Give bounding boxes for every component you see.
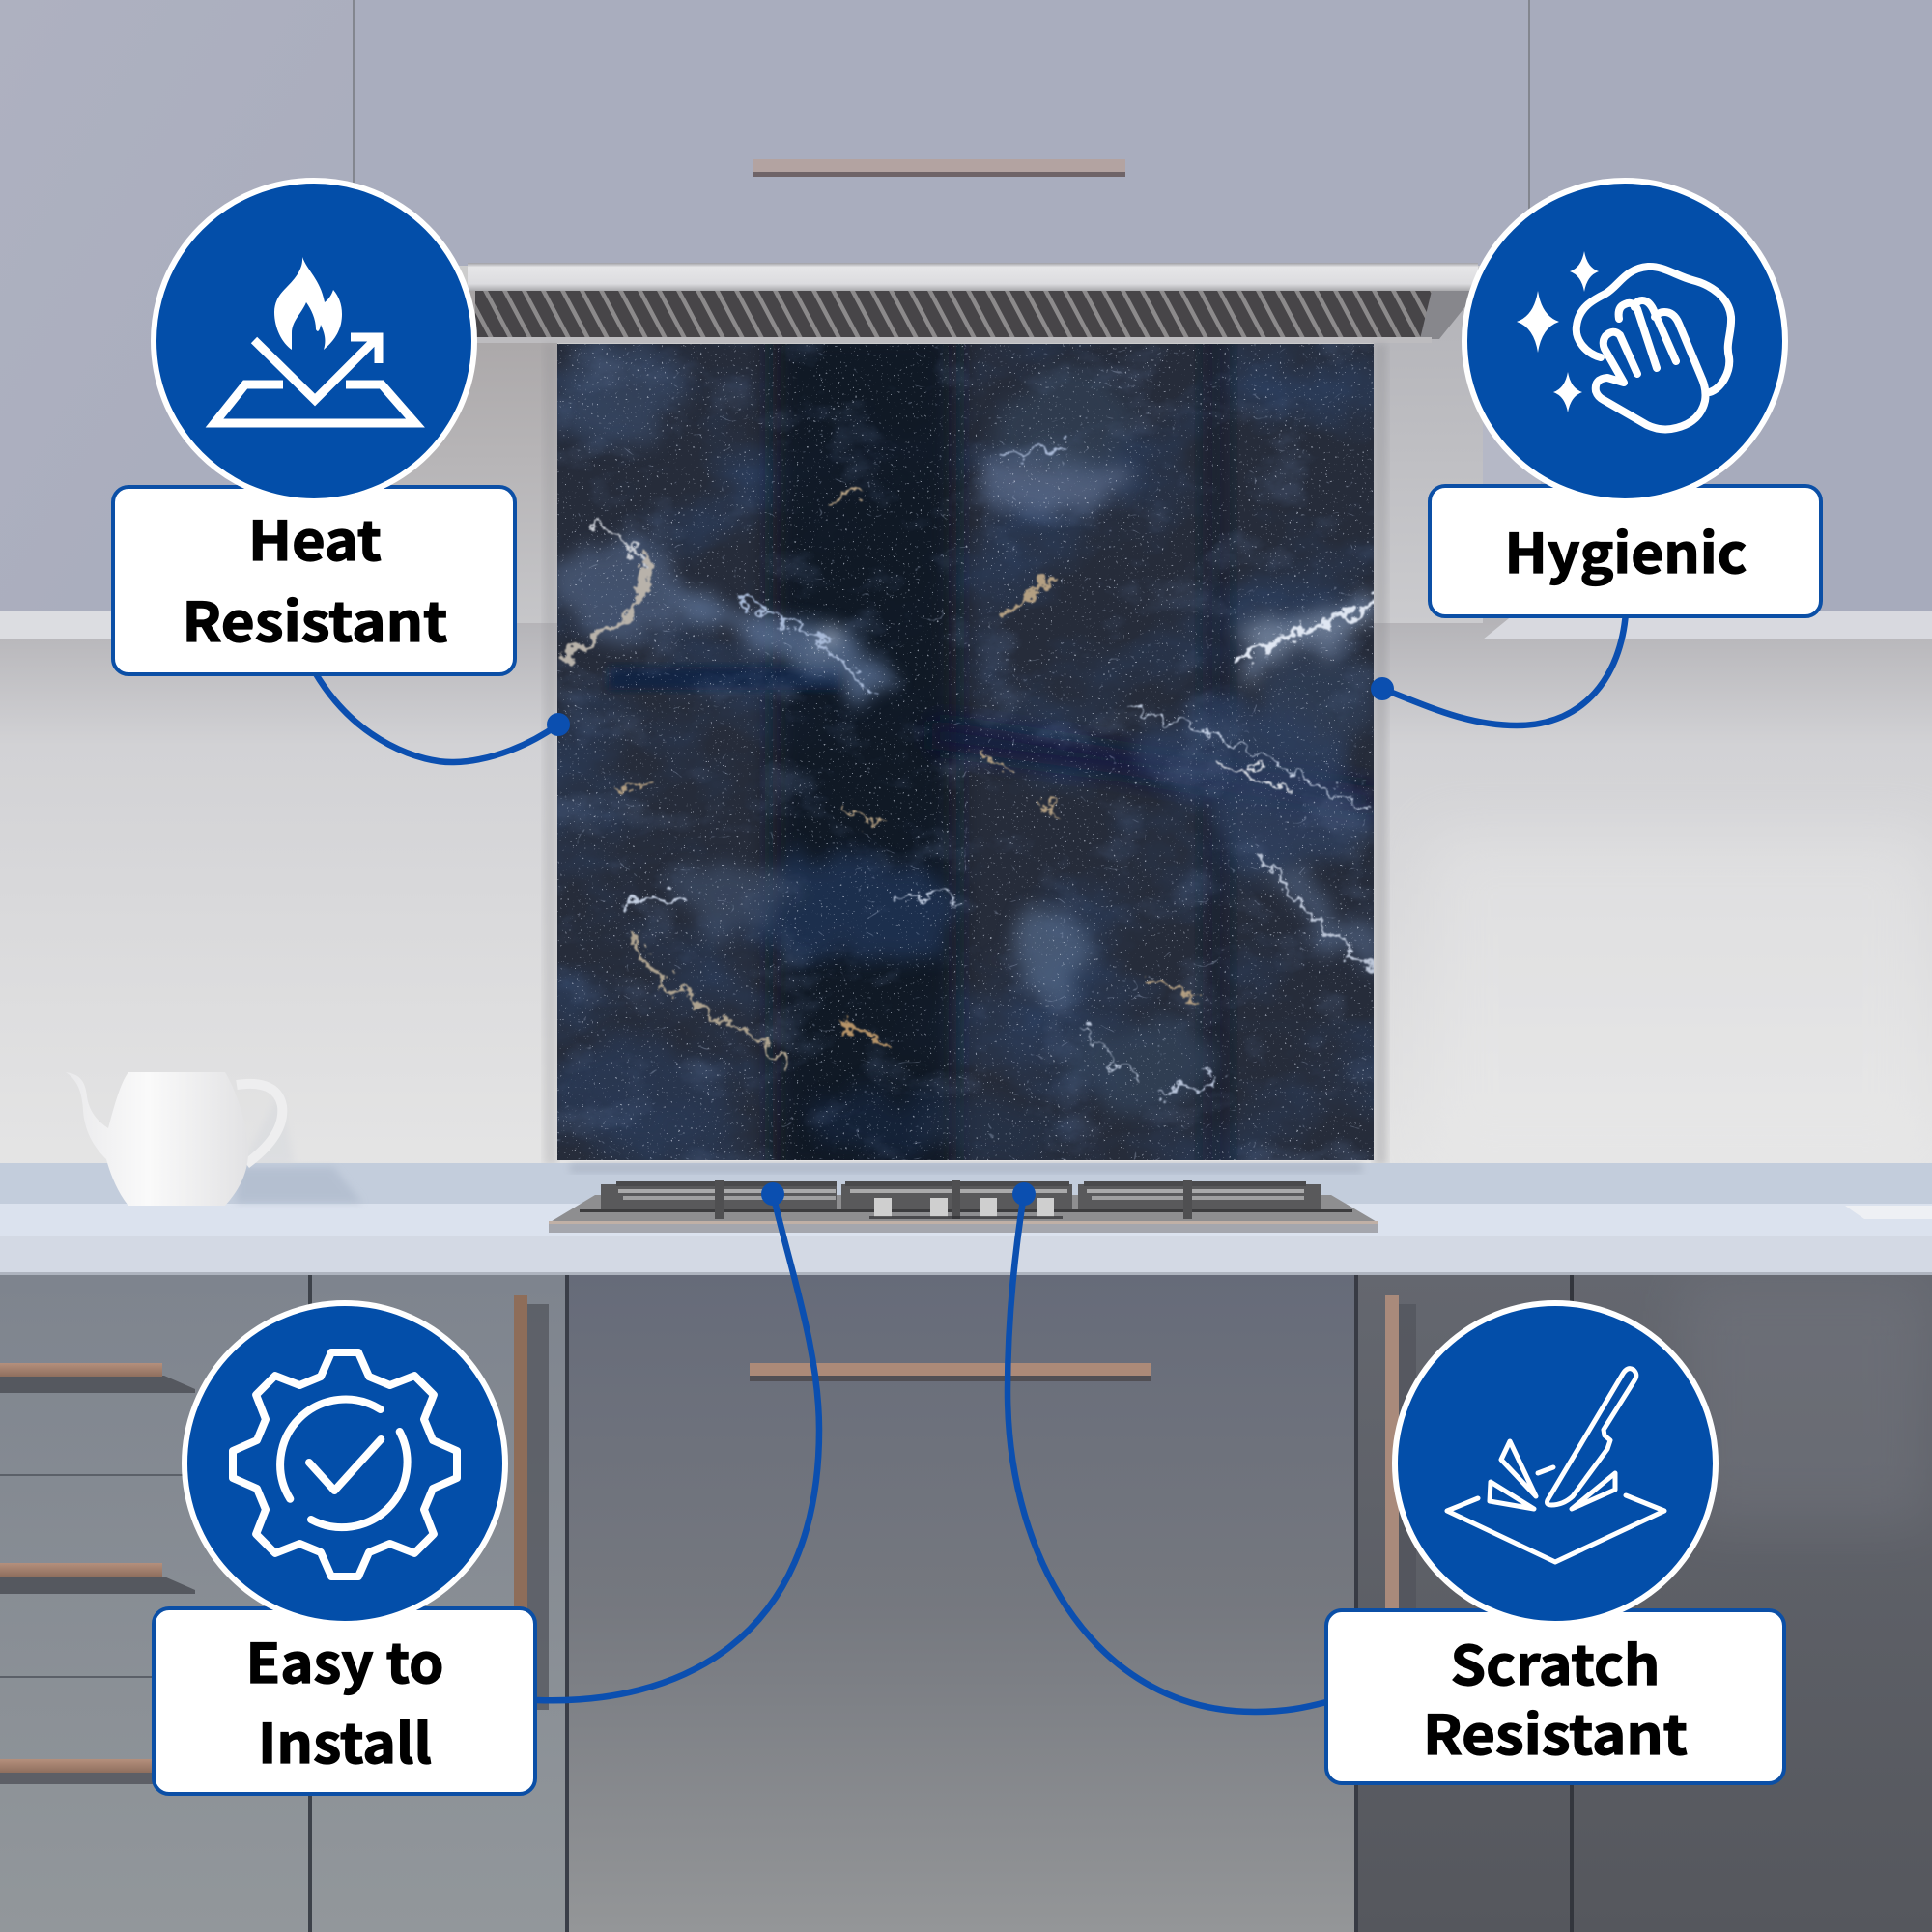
label box: scratch resistant xyxy=(1326,1610,1784,1783)
panel: scratch resistant xyxy=(1326,1303,1784,1783)
cabinet handle top xyxy=(753,159,1125,177)
icon disc: easy to install xyxy=(185,1303,505,1624)
icon disc: scratch resistant xyxy=(1395,1303,1716,1624)
cabinet handles lower xyxy=(0,1295,1416,1784)
connector: heat resistant xyxy=(315,672,570,762)
marble gold veins xyxy=(618,488,1196,1067)
icon: gear with check mark xyxy=(233,1352,457,1577)
cooktop xyxy=(549,1180,1378,1233)
dark reflection bands xyxy=(609,328,1374,1179)
countertop xyxy=(0,1163,1932,1275)
marble light cloud patches xyxy=(546,338,1381,1159)
marble splashback panel xyxy=(546,328,1381,1179)
icon: flame over surface with arrow xyxy=(214,257,415,423)
label box: scratch resistant: Resistant xyxy=(1423,1692,1688,1771)
label box: heat resistant: Resistant xyxy=(182,580,448,658)
icon disc: heat resistant xyxy=(154,181,474,501)
icon: hand wiping with sparkles xyxy=(1517,251,1731,429)
label box: easy to install: Install xyxy=(258,1701,432,1779)
label box: heat resistant: Heat xyxy=(248,498,382,577)
label box: hygienic xyxy=(1430,486,1821,616)
panel: hygienic xyxy=(1430,181,1821,616)
cooker hood xyxy=(468,263,1478,343)
icon: knife scratching surface xyxy=(1447,1369,1664,1562)
icon disc: hygienic xyxy=(1464,181,1785,501)
panel: heat resistant xyxy=(113,181,515,674)
label box: hygienic: Hygienic xyxy=(1505,511,1747,589)
label box: easy to install xyxy=(154,1608,535,1794)
marble white veins xyxy=(557,444,1374,1092)
connector: easy to install xyxy=(537,1182,819,1700)
teapot xyxy=(66,1072,362,1206)
upper cabinets xyxy=(0,0,1932,639)
lower cabinets xyxy=(0,1275,1932,1932)
label box: easy to install: Easy to xyxy=(245,1621,444,1699)
connector: hygienic xyxy=(1371,612,1626,725)
wall shading xyxy=(544,344,1932,1165)
label box: heat resistant xyxy=(113,487,515,674)
connector: scratch resistant xyxy=(1008,1182,1326,1712)
panel: easy to install xyxy=(154,1303,535,1794)
label box: scratch resistant: Scratch xyxy=(1451,1623,1660,1701)
